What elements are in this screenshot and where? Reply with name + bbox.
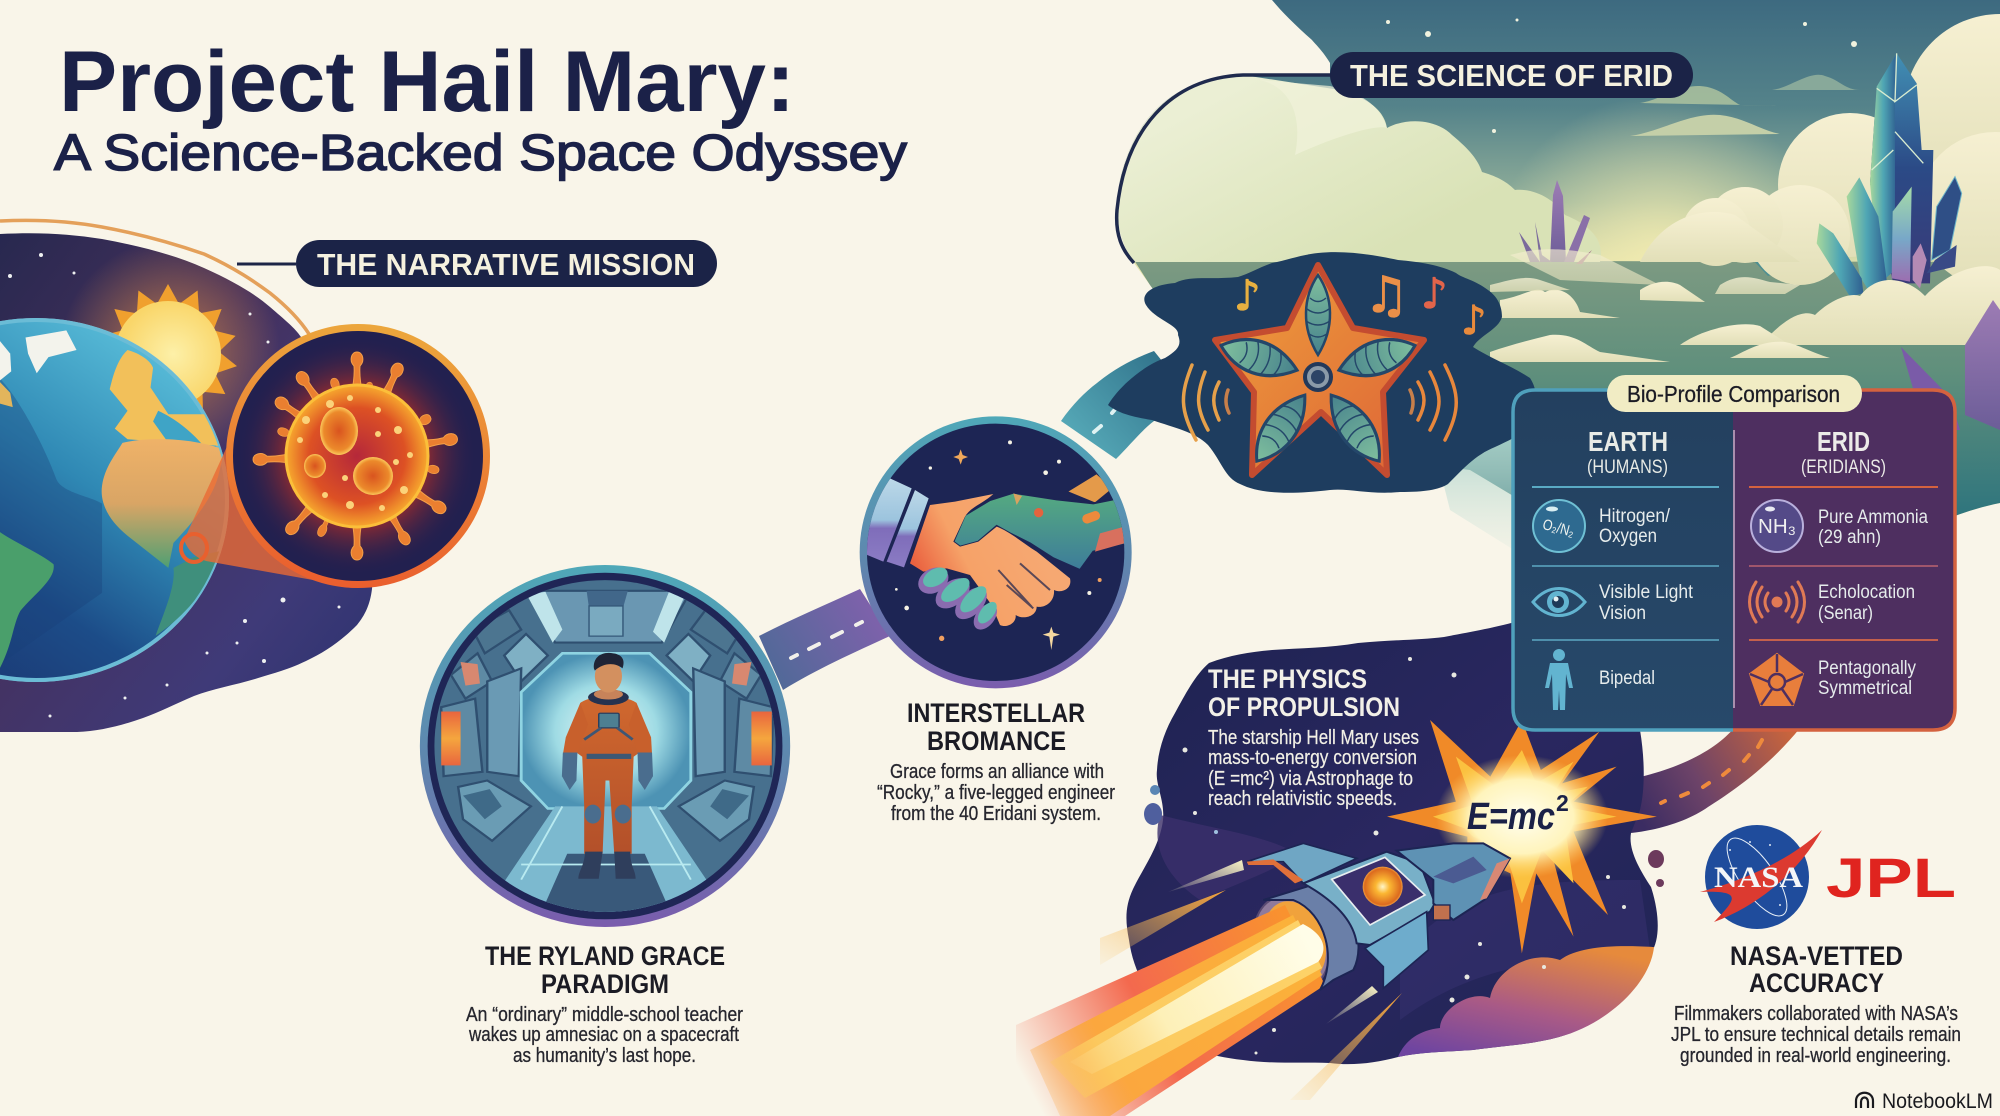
purple clouds — [1398, 946, 1654, 1057]
text block: physics of propulsion: The starship Hell Mary uses — [1208, 727, 1419, 749]
zoom callout cone — [184, 440, 358, 588]
far right purple crystal — [1901, 300, 2000, 430]
text block: interstellar bromance: INTERSTELLAR — [907, 698, 1085, 728]
text block: NASA-vetted accuracy: NASA-VETTED — [1730, 941, 1903, 971]
card title pill — [1607, 375, 1862, 412]
icon: JPL logo: JPL — [1826, 846, 1956, 909]
suit cuff bands — [863, 478, 912, 562]
label pill: the narrative mission — [237, 240, 717, 287]
column: Earth — [1532, 426, 1719, 710]
column: Erid: Pure Ammonia — [1818, 507, 1928, 528]
music notes: ♫ — [1364, 266, 1409, 324]
music notes: ♪ — [1234, 271, 1261, 320]
sea — [1134, 260, 2000, 540]
panel: narrative mission space blob — [0, 220, 400, 745]
text block: the Ryland Grace paradigm — [466, 941, 743, 1067]
column: Earth: (HUMANS) — [1587, 457, 1668, 478]
icon: air bubble — [1533, 500, 1585, 552]
title: Project Hail Mary: — [59, 34, 795, 130]
sound wave arcs — [1183, 365, 1456, 440]
icon: Ryland Grace in spacecraft corridor — [420, 565, 790, 927]
column: Earth: Oxygen — [1599, 526, 1657, 547]
text block: interstellar bromance: Grace forms an alliance with — [890, 761, 1104, 783]
alien fingers — [913, 562, 1002, 634]
sky stars — [1386, 18, 1857, 133]
icon: starburst — [1387, 720, 1657, 953]
column: Erid: Echolocation — [1818, 582, 1915, 603]
nose — [1397, 843, 1510, 920]
title — [54, 34, 908, 181]
icon: ammonia bubble: NH₃ — [1758, 516, 1796, 538]
sun — [112, 284, 237, 408]
icon: human and alien handshake — [860, 416, 1132, 688]
callout target ring — [181, 534, 207, 562]
icon: Earth — [0, 318, 229, 682]
engine drum — [1263, 880, 1359, 990]
subtitle: A Science-Backed Space Odyssey — [54, 124, 908, 181]
icon: NASA logo — [1700, 825, 1822, 929]
column: Erid: (Senar) — [1818, 603, 1873, 624]
gold cuff — [1068, 472, 1110, 502]
icon: NASA logo: NASA — [1714, 861, 1803, 894]
orange orbit arc — [0, 220, 309, 334]
icon: ammonia bubble — [1751, 500, 1803, 552]
blob stars — [1182, 657, 1626, 1054]
icon: pentagon symmetry — [1750, 654, 1803, 705]
text block: interstellar bromance: from the 40 Eridani system. — [891, 803, 1101, 825]
label pill: the science of Erid: THE SCIENCE OF ERID — [1350, 58, 1673, 93]
lower fin — [1365, 912, 1428, 988]
sparkles and stars — [895, 440, 1102, 650]
icon: sonar waves — [1750, 582, 1804, 622]
card title pill: Bio-Profile Comparison — [1627, 381, 1840, 407]
big left cloud — [1117, 75, 1601, 262]
column: Erid — [1749, 426, 1938, 705]
crystal cluster — [1817, 53, 1962, 297]
formula: E=mc — [1467, 796, 1555, 838]
decorative bubbles — [1144, 785, 1664, 887]
text block: NASA-vetted accuracy — [1671, 941, 1961, 1067]
text block: interstellar bromance: “Rocky,” a five-legged engineer — [877, 782, 1115, 804]
column: Erid: Pentagonally — [1818, 658, 1916, 679]
text block: physics of propulsion: OF PROPULSION — [1208, 692, 1400, 722]
purple nebula bands — [1157, 815, 1292, 900]
icon: Rocky five-armed star — [1215, 265, 1424, 475]
floor — [505, 806, 706, 912]
icon: air bubble: O₂/N₂ — [1541, 516, 1576, 541]
column: Erid: (29 ahn) — [1818, 527, 1881, 548]
text block: the Ryland Grace paradigm: wakes up amnesiac on a spacecraft — [468, 1024, 739, 1046]
text block: physics of propulsion: THE PHYSICS — [1208, 664, 1367, 694]
label pill: the narrative mission: THE NARRATIVE MISSION — [317, 247, 695, 282]
column: Earth: Bipedal — [1599, 668, 1655, 689]
text block: NASA-vetted accuracy: JPL to ensure technical details remain — [1671, 1024, 1961, 1046]
text block: NASA-vetted accuracy: ACCURACY — [1749, 968, 1884, 998]
panel: Rocky blob with star — [1108, 252, 1536, 493]
text block: the Ryland Grace paradigm: THE RYLAND GRACE — [485, 941, 725, 971]
music notes — [1234, 266, 1487, 344]
path: road from card to propulsion blob — [1631, 728, 1800, 833]
column: Erid: (ERIDIANS) — [1801, 457, 1886, 478]
icon: spaceship nozzle — [1241, 843, 1357, 1001]
icon: spaceship Hail Mary hull — [1263, 843, 1510, 990]
text block: physics of propulsion: mass-to-energy conversion — [1208, 747, 1417, 769]
column: Earth: Visible Light — [1599, 582, 1694, 603]
icon: person — [1545, 649, 1573, 710]
glowing octagon door — [521, 653, 691, 809]
foreground clouds on sea — [1490, 249, 2000, 362]
text block: physics of propulsion — [1208, 664, 1419, 810]
navy outline curve — [1117, 75, 1332, 263]
column: Earth: Hitrogen/ — [1599, 506, 1671, 527]
text block: the Ryland Grace paradigm: PARADIGM — [541, 969, 669, 999]
astronaut figure — [562, 653, 653, 879]
human hand — [910, 494, 1070, 626]
music notes: ♪ — [1461, 298, 1487, 344]
streaks — [1100, 860, 1402, 1100]
distant purple crystals — [1519, 180, 1780, 276]
NotebookLM watermark: NotebookLM — [1882, 1090, 1993, 1113]
text block: interstellar bromance — [877, 698, 1115, 825]
text block: the Ryland Grace paradigm: as humanity’s last hope. — [513, 1045, 696, 1067]
formula: 2 — [1556, 790, 1569, 816]
text block: interstellar bromance: BROMANCE — [927, 726, 1066, 756]
panel: physics of propulsion — [1016, 618, 1664, 1116]
column: Erid: ERID — [1817, 426, 1870, 457]
column: Earth: Vision — [1599, 603, 1646, 624]
text block: the Ryland Grace paradigm: An “ordinary” middle-school teacher — [466, 1004, 743, 1026]
panel: Erid alien landscape — [1117, 0, 2000, 560]
path: road from crew circle to handshake — [759, 589, 890, 690]
flames — [1016, 905, 1325, 1116]
icon: eye — [1533, 588, 1585, 616]
ceiling panels — [526, 591, 691, 643]
main crystal cluster backing clouds — [1630, 14, 2000, 288]
text block: NASA-vetted accuracy: Filmmakers collaborated with NASA’s — [1674, 1003, 1958, 1025]
alien arm — [953, 493, 1130, 570]
hull — [1303, 852, 1435, 945]
icon: Astrophage microbe in orange circle — [230, 328, 486, 584]
text block: NASA-vetted accuracy: grounded in real-world engineering. — [1680, 1045, 1951, 1067]
side wall panels left — [473, 610, 521, 653]
side wall panels right — [691, 610, 742, 653]
stars — [8, 253, 340, 718]
text block: physics of propulsion: (E =mc²) via Astrophage to — [1208, 768, 1413, 790]
pale mist below star — [1440, 420, 1530, 560]
path: road from handshake to star — [1061, 351, 1200, 459]
column: Erid: Symmetrical — [1818, 678, 1912, 699]
column: Earth: EARTH — [1588, 426, 1668, 457]
panel: bio-profile comparison — [1513, 375, 1955, 730]
music notes: ♪ — [1421, 269, 1448, 318]
text block: physics of propulsion: reach relativistic speeds. — [1208, 788, 1397, 810]
